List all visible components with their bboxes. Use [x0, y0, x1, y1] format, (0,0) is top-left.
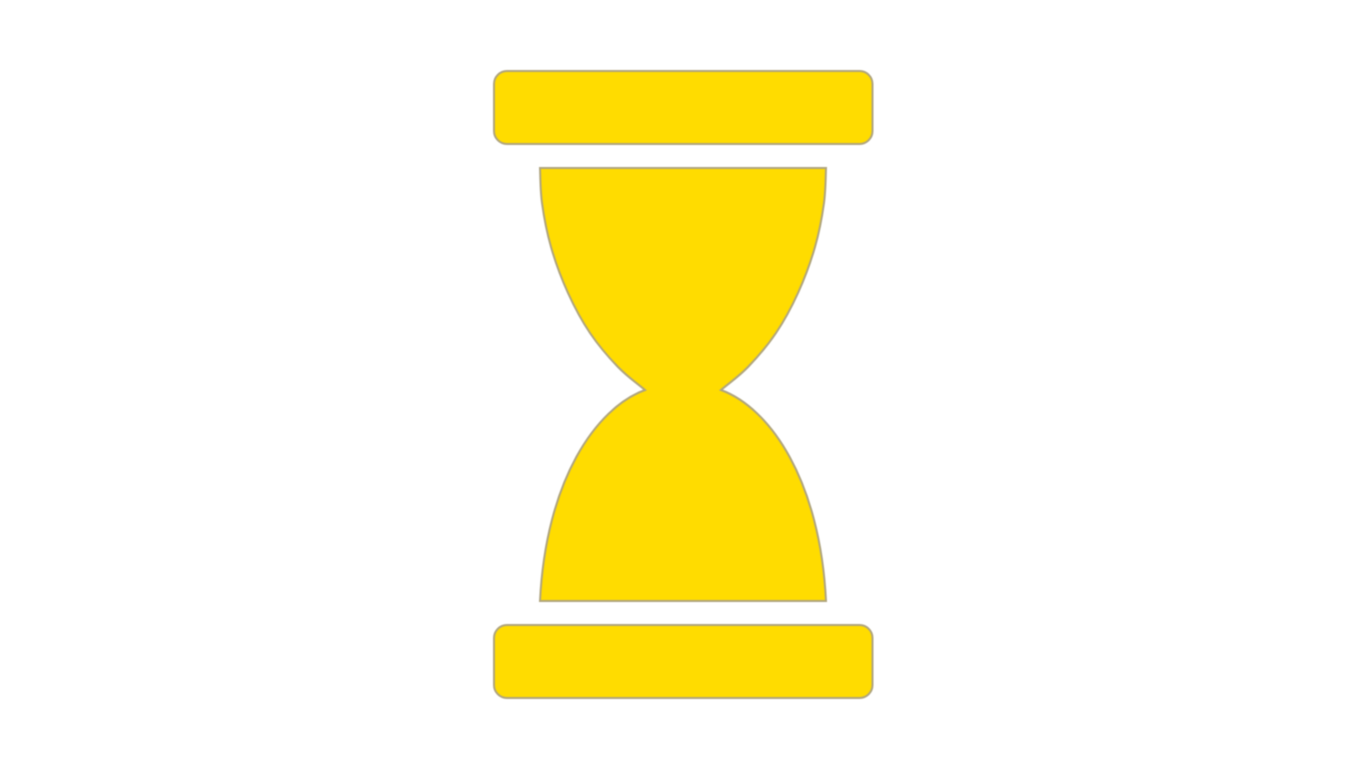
- bottom bar: [494, 625, 872, 698]
- hourglass body: [540, 168, 826, 601]
- top bar: [494, 71, 872, 144]
